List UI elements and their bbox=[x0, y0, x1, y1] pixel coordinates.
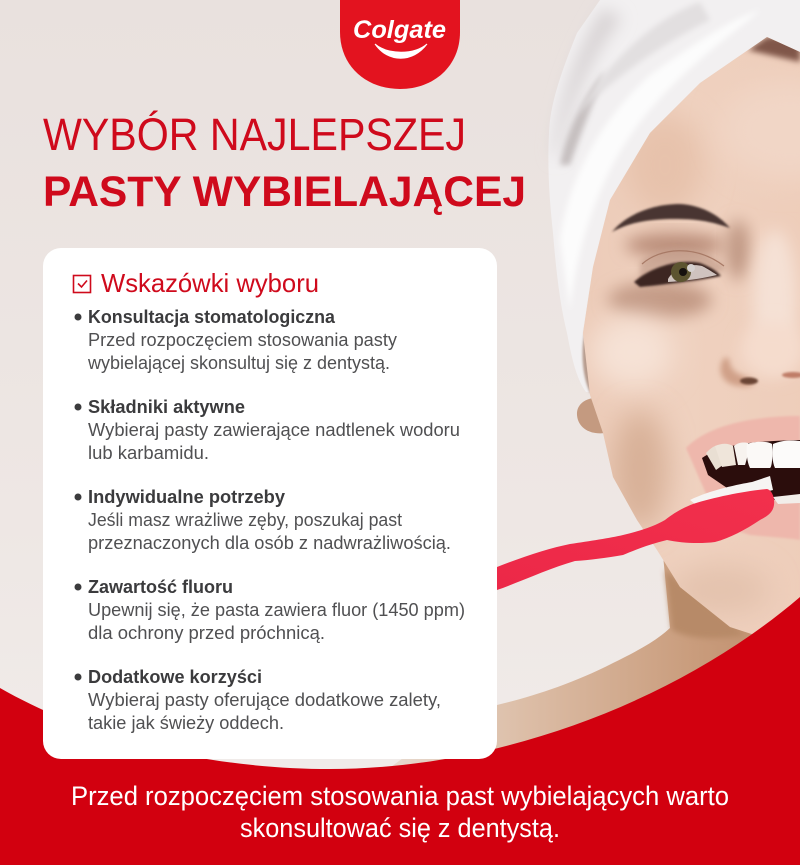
logo smile bbox=[375, 44, 427, 58]
shoulder and neck bbox=[380, 555, 800, 800]
red curved footer band bbox=[0, 597, 800, 865]
tip: active ingredients: Składniki aktywne bbox=[88, 396, 245, 417]
photo: woman with towel brushing teeth bbox=[380, 0, 800, 800]
title: PASTY WYBIELAJĄCEJ bbox=[43, 168, 526, 216]
tip: individual needs: przeznaczonych dla osób z nadwrażliwością. bbox=[88, 532, 451, 553]
panel: selection tips card bbox=[43, 248, 497, 759]
tip: active ingredients: lub karbamidu. bbox=[88, 442, 209, 463]
face bbox=[570, 30, 800, 650]
bristles bbox=[690, 476, 773, 508]
title bbox=[43, 109, 526, 216]
panel heading: Wskazówki wyboru bbox=[101, 268, 319, 298]
icon: checkbox bbox=[74, 276, 90, 292]
footer message bbox=[71, 781, 729, 843]
tip: consultation: wybielającej skonsultuj się z dentystą. bbox=[87, 352, 390, 373]
tip: fluoride content bbox=[74, 576, 465, 643]
logo wordmark: Colgate bbox=[353, 16, 446, 44]
footer message: skonsultować się z dentystą. bbox=[240, 813, 560, 843]
tip: additional benefits: Wybieraj pasty oferujące dodatkowe zalety, bbox=[88, 689, 441, 710]
tip: active ingredients: Wybieraj pasty zawierające nadtlenek wodoru bbox=[88, 419, 460, 440]
nose bbox=[718, 336, 800, 390]
eye bbox=[634, 248, 726, 287]
towel bbox=[548, 0, 800, 393]
tip: fluoride content: Zawartość fluoru bbox=[88, 576, 233, 597]
tip: consultation bbox=[74, 306, 398, 373]
tip: consultation: Przed rozpoczęciem stosowania pasty bbox=[88, 329, 398, 350]
logo: Colgate shield bbox=[340, 0, 460, 89]
tip: individual needs: Jeśli masz wrażliwe zęby, poszukaj past bbox=[88, 509, 402, 530]
tip: individual needs bbox=[74, 486, 451, 553]
ear bbox=[577, 398, 605, 433]
eyebrow bbox=[612, 204, 730, 232]
face shading bbox=[590, 37, 800, 616]
title: WYBÓR NAJLEPSZEJ bbox=[43, 109, 466, 160]
mouth bbox=[686, 416, 800, 540]
tip: individual needs: Indywidualne potrzeby bbox=[88, 486, 286, 507]
tip: fluoride content: dla ochrony przed próchnicą. bbox=[88, 622, 325, 643]
toothbrush bbox=[497, 476, 774, 590]
tip: additional benefits: takie jak świeży oddech. bbox=[88, 712, 284, 733]
tip: active ingredients bbox=[74, 396, 460, 463]
footer message: Przed rozpoczęciem stosowania past wybielających warto bbox=[71, 781, 729, 811]
tip: additional benefits bbox=[74, 666, 441, 733]
tip: fluoride content: Upewnij się, że pasta zawiera fluor (1450 ppm) bbox=[88, 599, 465, 620]
tip: consultation: Konsultacja stomatologiczna bbox=[88, 306, 336, 327]
tip: additional benefits: Dodatkowe korzyści bbox=[88, 666, 262, 687]
teeth bbox=[706, 440, 800, 504]
brush body bbox=[497, 489, 774, 590]
